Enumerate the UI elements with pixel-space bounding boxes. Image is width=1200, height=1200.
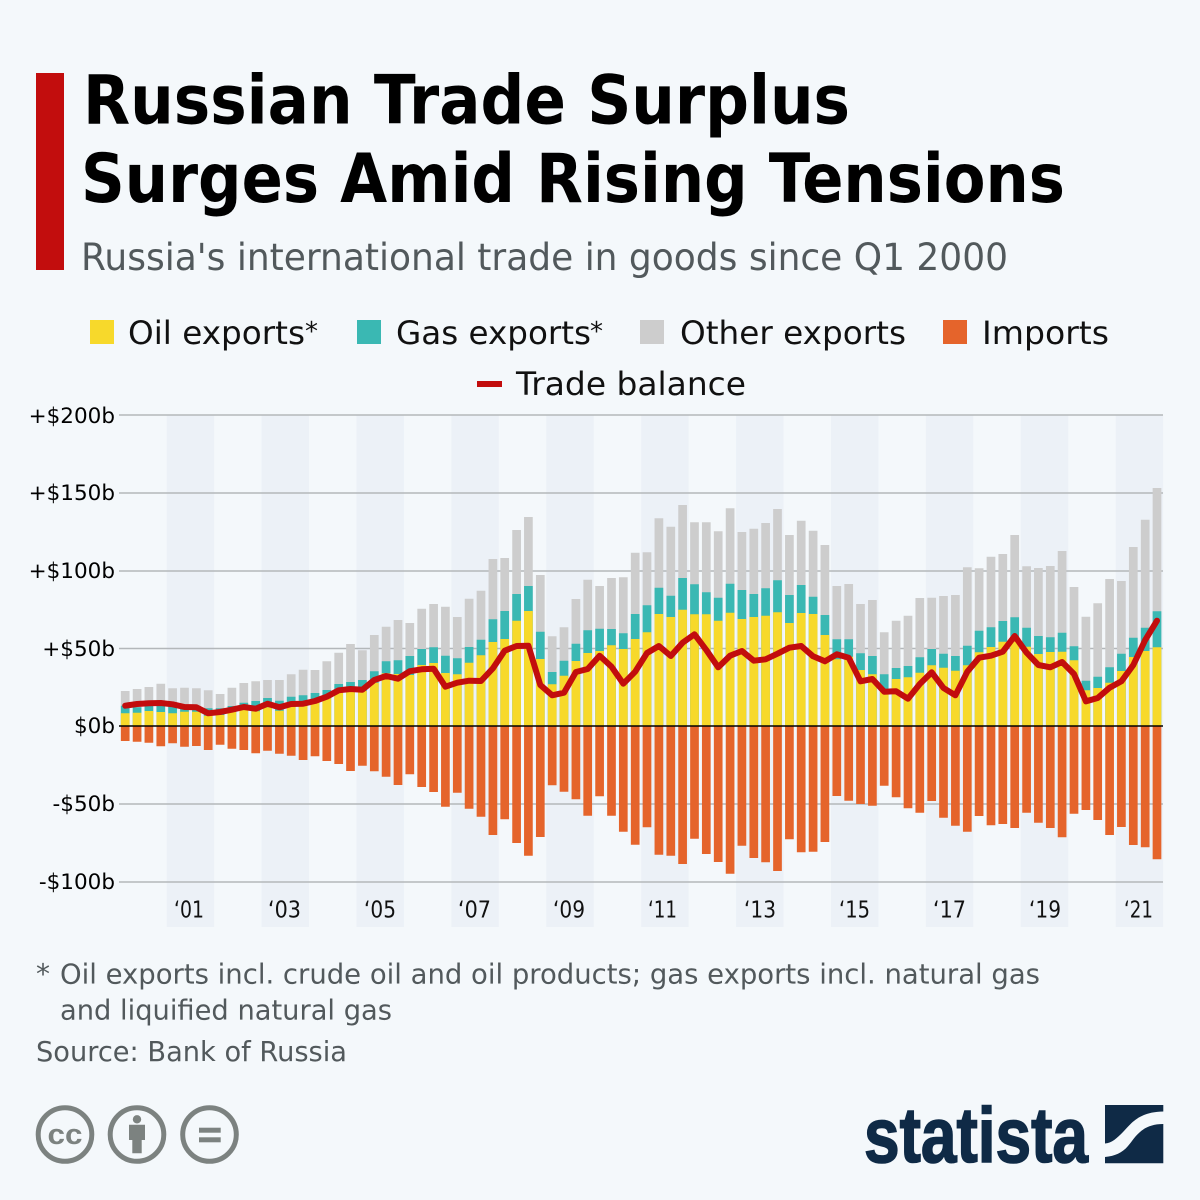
oil exports bars — [125, 610, 1157, 726]
icon: creative commons — [38, 1108, 92, 1161]
trade balance line — [125, 621, 1157, 713]
title: Surges Amid Rising Tensions — [81, 140, 1065, 219]
x axis year labels: ‘19 — [1029, 896, 1061, 924]
alternating year bands — [167, 415, 1163, 927]
x axis year labels: ‘09 — [553, 896, 585, 924]
subtitle: Russia's international trade in goods since Q1 2000 — [81, 236, 1008, 279]
legend item: other exports: Other exports — [680, 314, 906, 352]
icon: attribution person — [110, 1108, 164, 1161]
footnote: and liquified natural gas — [60, 994, 392, 1026]
legend item: gas exports: * — [590, 317, 603, 347]
y axis labels: +$50b — [42, 637, 115, 662]
source: Source: Bank of Russia — [36, 1035, 347, 1068]
y axis labels: $0b — [74, 714, 115, 739]
x axis year labels: ‘13 — [744, 896, 776, 924]
y axis labels: -$50b — [53, 792, 115, 817]
x axis year labels: ‘01 — [174, 896, 204, 924]
title accent bar — [36, 73, 64, 270]
footnote — [36, 958, 1040, 1026]
y axis labels — [29, 404, 115, 895]
statista logo: statista — [864, 1091, 1088, 1179]
footnote: * — [36, 958, 50, 990]
legend item: trade balance: Trade balance — [515, 365, 746, 403]
title — [81, 62, 1065, 219]
x axis year labels: ‘21 — [1124, 896, 1153, 924]
icon: creative commons: cc — [48, 1119, 82, 1151]
x axis year labels: ‘07 — [458, 896, 491, 924]
x axis year labels: ‘11 — [648, 896, 677, 924]
legend item: gas exports: Gas exports — [396, 314, 591, 352]
footnote: Oil exports incl. crude oil and oil products; gas exports incl. natural gas — [60, 958, 1040, 990]
title: Russian Trade Surplus — [83, 62, 850, 140]
y axis labels: +$150b — [29, 481, 115, 506]
stacked bar chart — [125, 488, 1157, 874]
imports bars — [125, 726, 1157, 874]
legend — [90, 314, 1109, 403]
y axis labels: +$100b — [29, 559, 115, 584]
icon: no derivatives equals — [183, 1108, 236, 1161]
other exports bars — [125, 488, 1157, 726]
legend item: imports: Imports — [982, 314, 1109, 352]
x axis year labels: ‘05 — [364, 896, 396, 924]
y axis labels: -$100b — [39, 870, 115, 895]
y axis labels: +$200b — [29, 404, 115, 429]
x axis year labels — [174, 896, 1153, 924]
legend item: oil exports: Oil exports — [128, 314, 305, 352]
gas exports bars — [125, 578, 1157, 726]
legend item: oil exports: * — [305, 317, 318, 347]
x axis year labels: ‘17 — [933, 896, 966, 924]
x axis year labels: ‘15 — [839, 896, 870, 924]
x axis year labels: ‘03 — [268, 896, 301, 924]
